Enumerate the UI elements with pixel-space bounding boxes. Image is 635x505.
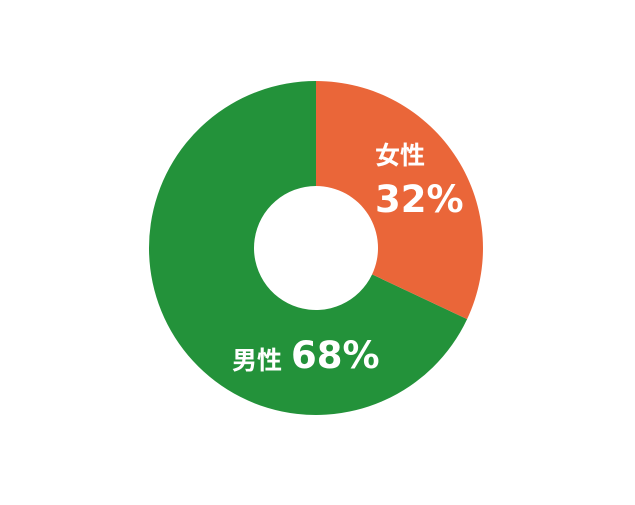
segment: female 32% xyxy=(316,81,483,319)
label: female 32% xyxy=(375,142,464,221)
label: female 32%: 32% xyxy=(375,178,464,221)
label: male 68%: 68% xyxy=(291,334,380,377)
segment: male 68% xyxy=(149,81,467,415)
label: male 68%: 男性 xyxy=(232,347,282,375)
label: male 68% xyxy=(232,334,380,377)
label: female 32%: 女性 xyxy=(375,142,425,170)
